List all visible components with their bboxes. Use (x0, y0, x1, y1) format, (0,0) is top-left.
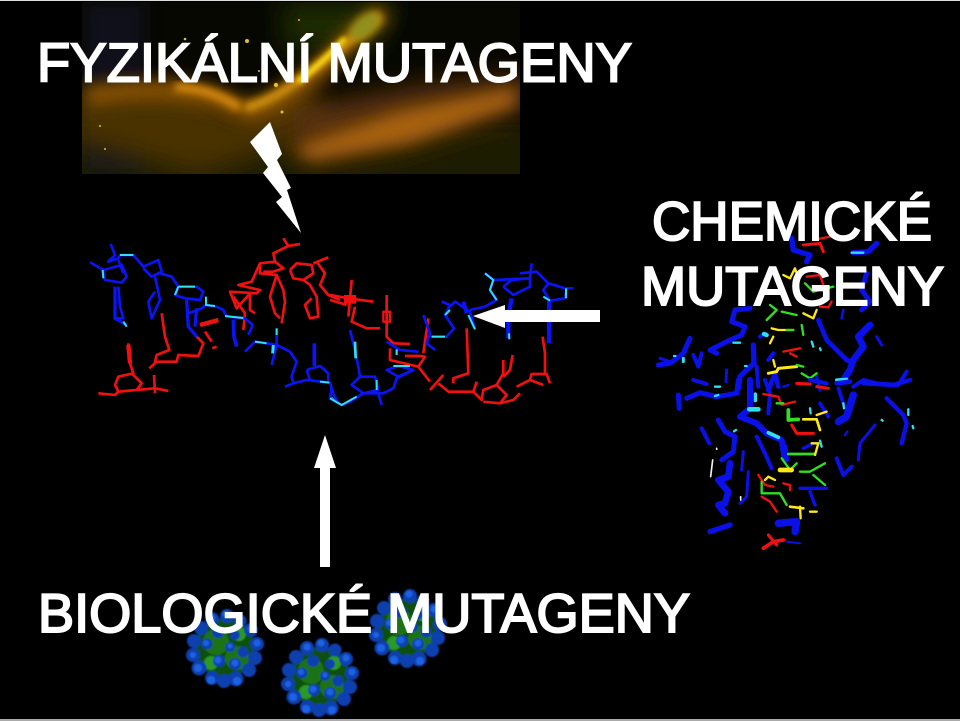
icon: lightning bolt (250, 122, 301, 233)
heading: physical mutagens: FYZIKÁLNÍ MUTAGENY (37, 32, 632, 94)
heading: chemical mutagens: MUTAGENY (641, 256, 944, 317)
heading: chemical mutagens: CHEMICKÉ (652, 191, 932, 252)
icon: virus centre (281, 638, 359, 717)
chart: double helix molecule (658, 237, 913, 548)
arrow: pointing up to DNA (314, 435, 336, 567)
image: aurora sky (82, 2, 520, 174)
heading: chemical mutagens (641, 191, 944, 317)
icon: virus right (369, 589, 447, 668)
icon: virus left (186, 609, 264, 688)
heading: biological mutagens: BIOLOGICKÉ MUTAGENY (38, 583, 690, 644)
arrow: pointing left to DNA (473, 305, 600, 328)
chart: DNA strand molecule (90, 238, 573, 405)
